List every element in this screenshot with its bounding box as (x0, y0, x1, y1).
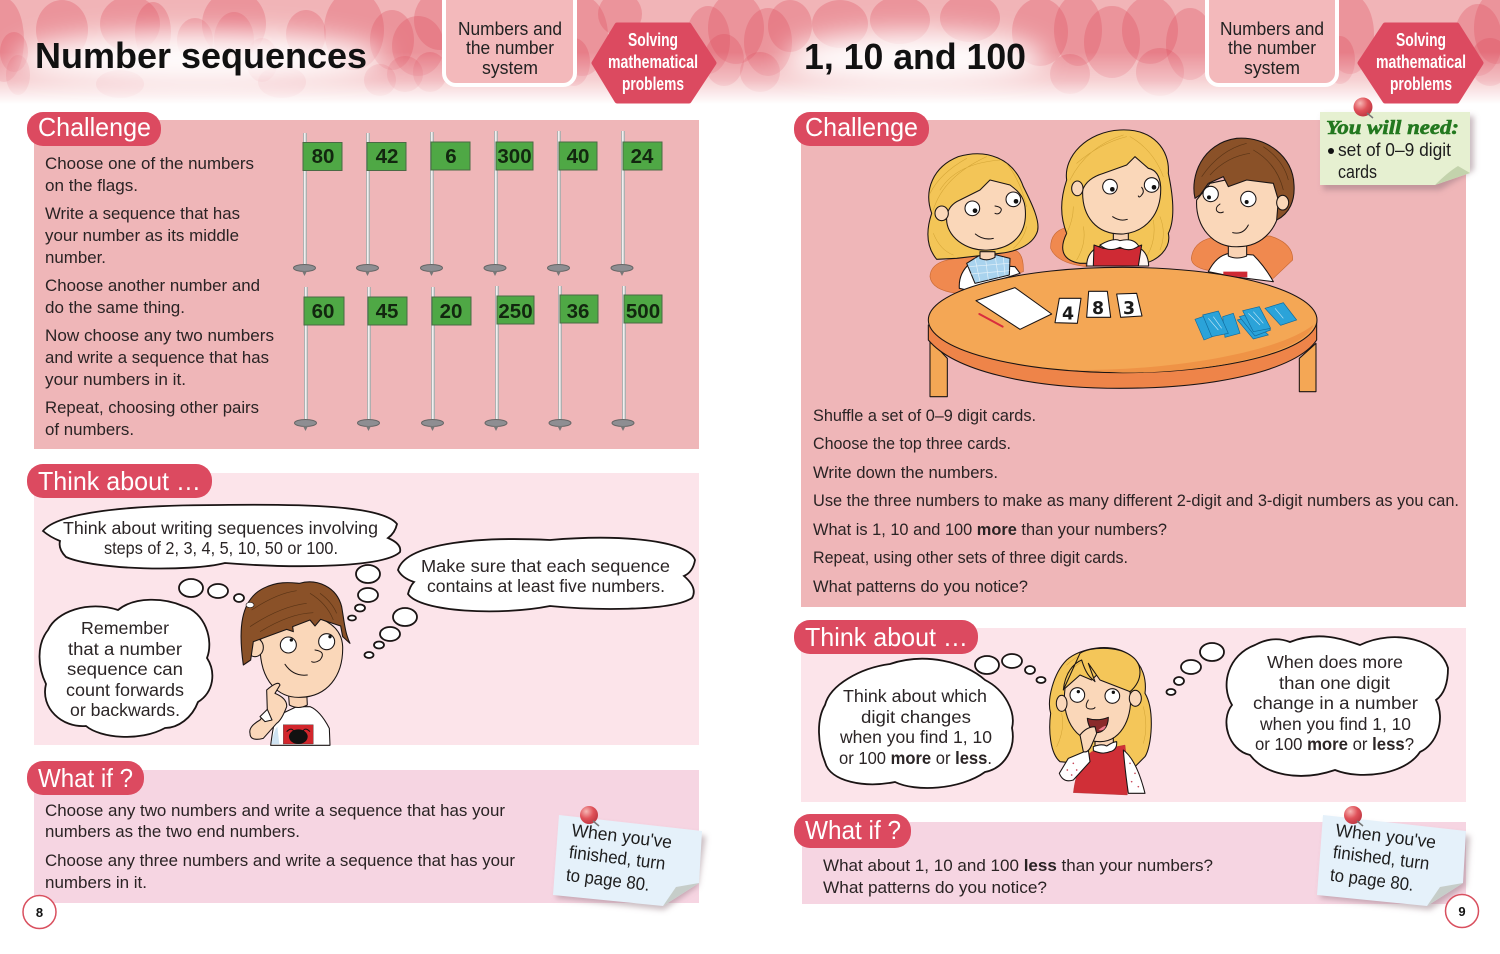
number flags row 2: 60 (312, 300, 334, 323)
panel: right what if (794, 814, 1466, 904)
nav tab left: Numbers and the number system: system (482, 58, 538, 78)
blue card piles (1195, 303, 1297, 340)
nav tab right: Numbers and the number system: the number (1228, 38, 1316, 58)
panel: right think about (794, 620, 1466, 802)
number flags row 2: 500 (626, 300, 660, 323)
nav tab right: Numbers and the number system (1207, 0, 1337, 85)
challenge instructions (45, 154, 274, 439)
number flags row 2: 36 (567, 300, 589, 323)
nav hexagon left: Solving mathematical problems: problems (622, 74, 684, 94)
digit cards 4 8 3: 8 (1092, 299, 1104, 319)
paper and pencil (976, 288, 1052, 329)
nav tab left: Numbers and the number system: Numbers and (458, 19, 562, 39)
heading: Think about: Think about … (38, 466, 201, 496)
nav tab left: Numbers and the number system (444, 0, 575, 85)
thought bubble: count forwards or backwards: Remember (81, 618, 169, 638)
character: thinking boy (241, 582, 350, 745)
thought bubble: five numbers (398, 538, 695, 611)
challenge instructions: Use the three numbers to make as many different 2-digit and 3-digit numbers as you can. (813, 491, 1459, 510)
thought bubble: which digit changes: digit changes (861, 707, 971, 727)
thought bubble: sequences steps (43, 505, 400, 569)
header band (0, 0, 1500, 104)
challenge instructions: on the flags. (45, 176, 138, 195)
thought bubble: which digit changes: Think about which (843, 686, 987, 706)
challenge instructions: of numbers. (45, 420, 134, 439)
heading: What if?: What if ? (38, 763, 133, 793)
panel: left what if (27, 761, 699, 903)
sticky note left: turn to page 80: When you've (571, 820, 673, 852)
thought bubble: more than one digit change: than one digit (1279, 673, 1390, 693)
nav hexagon left: Solving mathematical problems: Solving (628, 30, 678, 50)
thought dots left (179, 579, 244, 602)
challenge instructions: Write down the numbers. (813, 463, 998, 482)
digit cards 4 8 3: 4 (1062, 304, 1074, 324)
challenge instructions: Choose the top three cards. (813, 434, 1011, 453)
challenge instructions: do the same thing. (45, 298, 185, 317)
character: thinking girl (1050, 648, 1151, 795)
number flags row 1: 42 (376, 145, 398, 168)
thought bubble: more than one digit change: or 100 more or less? (1255, 734, 1414, 754)
number flags row 1: 80 (312, 145, 334, 168)
thought bubble: which digit changes (819, 659, 1013, 788)
what if text (45, 801, 515, 892)
number flags row 1: 300 (497, 145, 532, 168)
challenge instructions: Repeat, choosing other pairs (45, 398, 259, 417)
panel: left think about (27, 464, 699, 745)
challenge instructions: Shuffle a set of 0–9 digit cards. (813, 406, 1036, 425)
thought bubble: which digit changes: or 100 more or less. (839, 748, 992, 768)
what if text: Choose any three numbers and write a sequence that has your (45, 851, 515, 870)
thought bubble: count forwards or backwards: or backwards. (70, 700, 180, 720)
page number 9: 9 (1458, 904, 1466, 919)
digit cards 4 8 3: 3 (1123, 299, 1135, 319)
challenge instructions (813, 406, 1459, 596)
nav tab left: Numbers and the number system: the number (466, 38, 554, 58)
challenge instructions: your number as its middle (45, 226, 239, 245)
sticky note left: turn to page 80: to page 80. (565, 865, 651, 895)
illustration: children at table with cards (928, 130, 1317, 397)
nav hexagon right: Solving mathematical problems: mathematical (1376, 52, 1466, 72)
thought bubble: sequences steps: Think about writing sequences involving (63, 518, 378, 538)
what if text: numbers as the two end numbers. (45, 822, 300, 841)
digit cards 4 8 3 (1055, 291, 1142, 324)
nav hexagon left: Solving mathematical problems: mathematical (608, 52, 698, 72)
thought bubble: count forwards or backwards: that a number (68, 639, 182, 659)
nav hexagon right: Solving mathematical problems: Solving (1396, 30, 1446, 50)
thought dots right (348, 565, 417, 658)
number flags row 2: 45 (376, 300, 398, 323)
sticky note right: turn to page 80 (1317, 806, 1470, 910)
challenge instructions: What is 1, 10 and 100 more than your numbers? (813, 520, 1167, 539)
what if text: Choose any two numbers and write a sequence that has your (45, 801, 505, 820)
girl on left (928, 154, 1038, 290)
sticky note right: turn to page 80: finished, turn (1332, 842, 1431, 874)
sticky note: you will need: set of 0–9 digit (1338, 140, 1451, 160)
challenge instructions: your numbers in it. (45, 370, 186, 389)
number flags row 2 (294, 286, 662, 431)
nav hexagon right: Solving mathematical problems (1360, 25, 1481, 101)
thought dots right (1166, 643, 1224, 695)
chairs (930, 227, 1293, 293)
challenge instructions: Repeat, using other sets of three digit cards. (813, 548, 1128, 567)
sticky note left: turn to page 80 (553, 806, 706, 910)
thought bubble: more than one digit change: When does more (1267, 652, 1403, 672)
what if text: What patterns do you notice? (823, 878, 1047, 897)
page number 9 (1446, 894, 1478, 928)
sticky note left: turn to page 80: finished, turn (568, 842, 667, 874)
sticky note: you will need (1320, 98, 1474, 190)
number flags row 1: 24 (631, 145, 654, 168)
heading: Think about: Think about … (805, 622, 968, 652)
nav tab right: Numbers and the number system: system (1244, 58, 1300, 78)
nav hexagon right: Solving mathematical problems: problems (1390, 74, 1452, 94)
challenge instructions: Choose another number and (45, 276, 260, 295)
number flags row 2: 20 (440, 300, 462, 323)
panel: right challenge (794, 112, 1466, 607)
thought bubble: which digit changes: when you find 1, 10 (839, 727, 992, 747)
panel: left challenge (27, 112, 699, 449)
nav tab right: Numbers and the number system: Numbers and (1220, 19, 1324, 39)
sticky note right: turn to page 80: When you've (1335, 820, 1437, 852)
thought dots left (975, 654, 1046, 683)
girl in middle (1062, 130, 1173, 266)
thought bubble: more than one digit change: change in a number (1253, 693, 1418, 713)
thought bubble: count forwards or backwards (40, 600, 212, 737)
what if text (823, 856, 1213, 897)
nav hexagon left: Solving mathematical problems (594, 25, 714, 101)
thought bubble: more than one digit change: when you find 1, 10 (1259, 714, 1411, 734)
thought bubble: count forwards or backwards: sequence can (67, 659, 183, 679)
thought bubble: sequences steps: steps of 2, 3, 4, 5, 10, 50 or 100. (104, 538, 338, 558)
thought bubble: five numbers: contains at least five numbers. (427, 576, 665, 596)
heading: Challenge: Challenge (805, 112, 918, 142)
number flags row 1 (294, 131, 662, 276)
thought bubble: more than one digit change (1226, 636, 1448, 776)
challenge instructions: Now choose any two numbers (45, 326, 274, 345)
page number 8 (23, 896, 56, 928)
thought bubble: count forwards or backwards: count forwards (66, 680, 184, 700)
sticky note: you will need: You will need: (1326, 117, 1459, 139)
thought bubble: five numbers: Make sure that each sequence (421, 556, 670, 576)
number flags row 2: 250 (498, 300, 533, 323)
page number 8: 8 (36, 905, 43, 920)
heading: What if?: What if ? (805, 815, 901, 845)
challenge instructions: number. (45, 248, 106, 267)
sticky note right: turn to page 80: to page 80. (1329, 865, 1415, 895)
challenge instructions: What patterns do you notice? (813, 577, 1028, 596)
challenge instructions: and write a sequence that has (45, 348, 269, 367)
title: 1, 10 and 100: 1, 10 and 100 (804, 36, 1026, 77)
what if text: What about 1, 10 and 100 less than your numbers? (823, 856, 1213, 875)
boy on right (1194, 138, 1294, 282)
challenge instructions: Choose one of the numbers (45, 154, 254, 173)
number flags row 1: 40 (567, 145, 589, 168)
what if text: numbers in it. (45, 873, 147, 892)
challenge instructions: Write a sequence that has (45, 204, 240, 223)
table (928, 267, 1317, 397)
number flags row 1: 6 (445, 145, 457, 168)
title: Number sequences: Number sequences (35, 35, 367, 76)
heading: Challenge: Challenge (38, 112, 151, 142)
sticky note: you will need: cards (1338, 162, 1377, 182)
